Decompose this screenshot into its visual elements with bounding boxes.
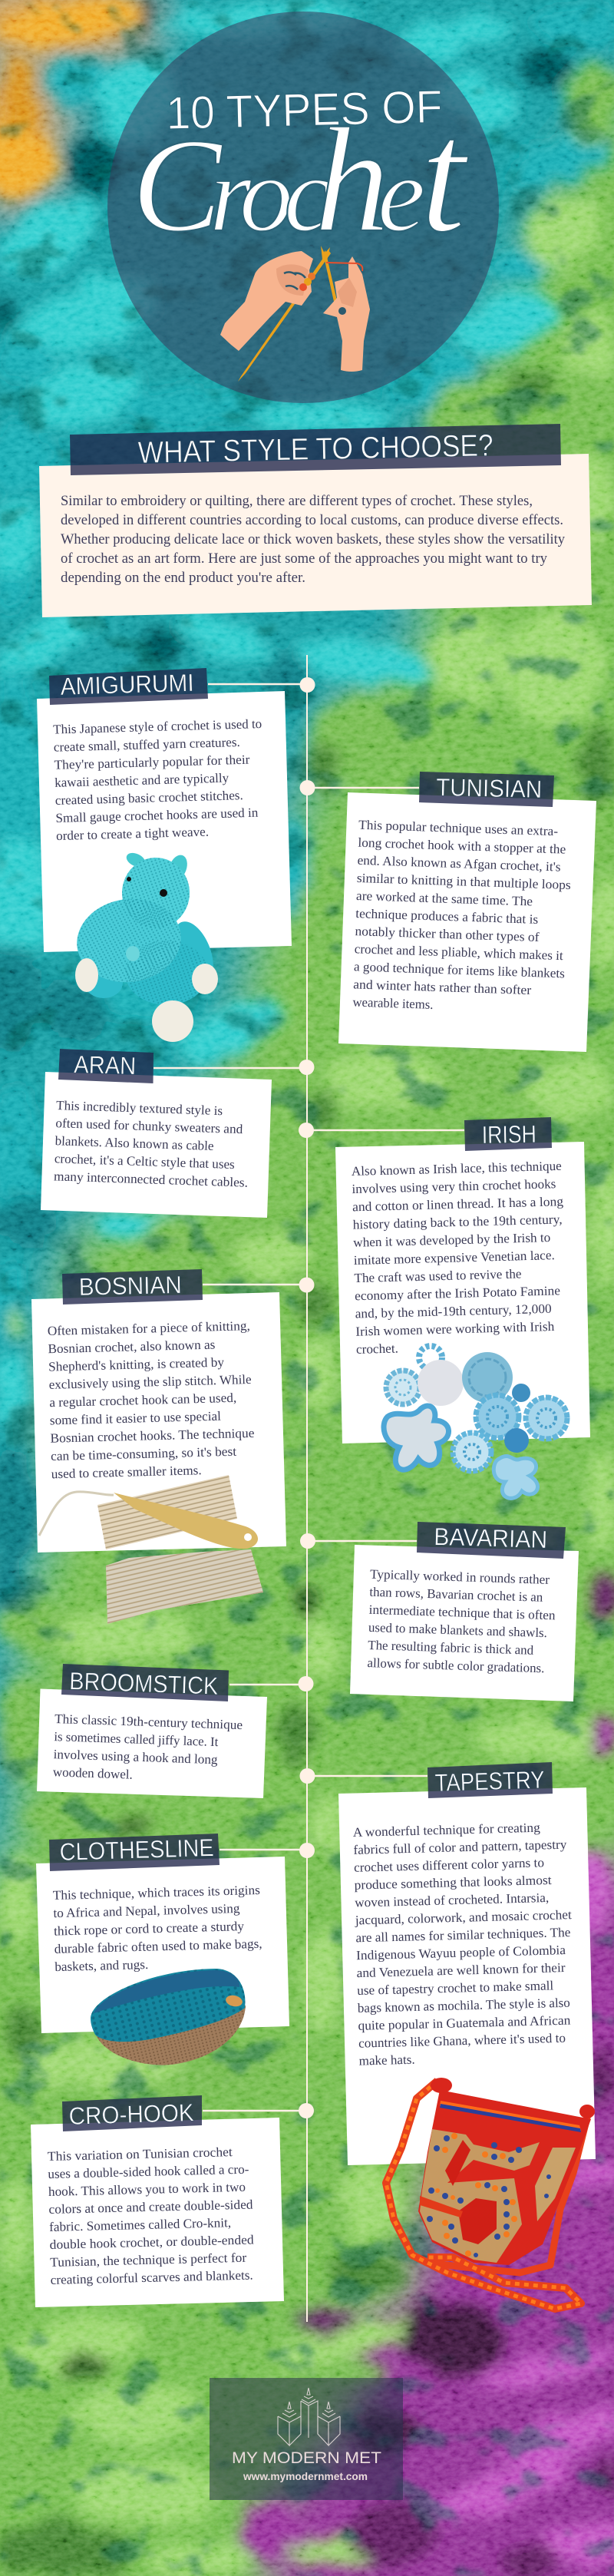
body text <box>48 1318 256 1481</box>
body text: wooden dowel. <box>53 1764 133 1782</box>
panel: cro-hook <box>31 2095 314 2307</box>
body text: involves using a hook and long <box>53 1747 218 1767</box>
footer logo: my modern met <box>210 2378 403 2500</box>
intro text: of crochet as an art form. Here are just some of the approaches you might want to try <box>61 551 548 567</box>
connector <box>299 780 419 795</box>
body text: end. Also known as Afgan crochet, it's <box>357 853 561 875</box>
label band <box>464 1117 552 1151</box>
intro card <box>39 454 592 617</box>
body text: than rows, Bavarian crochet is an <box>369 1585 543 1605</box>
body text: technique produces a fabric that is <box>355 906 539 927</box>
body text: crochet and less pliable, which makes it <box>355 941 563 963</box>
connector <box>208 677 315 693</box>
label: BAVARIAN <box>434 1523 548 1553</box>
body text: blankets. Also known as cable <box>54 1133 214 1153</box>
body text: kawaii aesthetic and are typically <box>54 771 229 790</box>
body text: Typically worked in rounds rather <box>370 1567 550 1587</box>
body text: The resulting fabric is thick and <box>368 1638 534 1658</box>
body text: a regular crochet hook can be used, <box>49 1391 236 1410</box>
label band <box>58 1049 154 1083</box>
label: ARAN <box>74 1050 137 1080</box>
body text <box>352 1820 576 2068</box>
timeline line <box>306 655 308 2322</box>
connector <box>203 1278 315 1293</box>
body text: use of tapestry crochet to make small <box>357 1978 554 1998</box>
body text: a good technique for items like blankets <box>354 959 565 980</box>
body text: crochet uses different color yarns to <box>354 1855 544 1875</box>
label: CRO-HOOK <box>68 2098 194 2130</box>
body text <box>367 1567 557 1676</box>
connector <box>300 1533 417 1549</box>
label band <box>419 772 554 807</box>
body text: This popular technique uses an extra- <box>358 818 559 838</box>
body text: A wonderful technique for creating <box>353 1820 541 1840</box>
body text: The craft was used to revive the <box>354 1266 522 1285</box>
body text: This incredibly textured style is <box>56 1098 223 1118</box>
body text: are all names for similar techniques. The <box>355 1925 571 1945</box>
label: BROOMSTICK <box>69 1667 219 1700</box>
body text: jacquard, colorwork, and mosaic crochet <box>355 1907 572 1927</box>
body text: intermediate technique that is often <box>368 1602 556 1622</box>
panel: broomstick <box>37 1664 313 1798</box>
label: CLOTHESLINE <box>59 1834 214 1866</box>
icon: building skyline <box>278 2388 340 2445</box>
body text: thick rope or cord to create a sturdy <box>54 1919 245 1939</box>
body text <box>53 1883 262 1974</box>
card <box>338 1787 596 2165</box>
body text: Also known as Irish lace, this technique <box>352 1159 562 1179</box>
body text: and winter hats rather than softer <box>353 977 532 997</box>
panel: amigurumi <box>37 668 315 1042</box>
body text: and Venezuela are well known for their <box>356 1960 566 1980</box>
title word: crochet: h <box>315 98 390 263</box>
connector <box>154 1060 315 1075</box>
body text: uses a double-sided hook called a cro- <box>48 2162 249 2181</box>
title word: crochet: e <box>378 135 425 254</box>
body text: wearable items. <box>352 994 434 1012</box>
body text: to Africa and Nepal, involves using <box>53 1901 240 1920</box>
panel: bavarian <box>300 1522 579 1701</box>
connector <box>220 1843 315 1858</box>
body text: colors at once and create double-sided <box>48 2197 253 2217</box>
body text: allows for subtle color gradations. <box>367 1655 545 1675</box>
body text: double hook crochet, or double-ended <box>49 2232 254 2252</box>
body text: similar to knitting in that multiple loops <box>357 871 571 892</box>
body text: order to create a tight weave. <box>56 825 209 843</box>
card <box>31 2118 284 2307</box>
body text: fabric. Sometimes called Cro-knit, <box>49 2215 231 2234</box>
icon: hands crocheting <box>220 246 370 382</box>
intro text: Similar to embroidery or quilting, there are different types of crochet. These styles, <box>61 494 533 509</box>
title word: crochet: o <box>239 135 293 254</box>
connector <box>299 1768 427 1784</box>
body text: woven instead of crocheted. Intarsia, <box>355 1890 549 1910</box>
logo name: MY MODERN MET <box>232 2449 381 2467</box>
body text: Shepherd's knitting, is created by <box>48 1355 225 1374</box>
logo panel <box>210 2378 403 2500</box>
logo url: www.mymodernmet.com <box>243 2470 368 2482</box>
body text: Tunisian, the technique is perfect for <box>50 2250 247 2270</box>
body text: Bosnian crochet, also known as <box>48 1338 216 1356</box>
body text: are worked at the same time. The <box>356 888 533 909</box>
intro text: depending on the end product you're after. <box>61 570 305 586</box>
panel: tunisian <box>299 772 596 1052</box>
card <box>335 1142 590 1443</box>
body text: and, by the mid-19th century, 12,000 <box>355 1301 552 1321</box>
body text: durable fabric often used to make bags, <box>54 1936 262 1956</box>
label: TAPESTRY <box>434 1766 545 1797</box>
body text: They're particularly popular for their <box>54 752 250 772</box>
body text: This Japanese style of crochet is used to <box>53 716 262 737</box>
body text: long crochet hook with a stopper at the <box>358 835 566 857</box>
body text: created using basic crochet stitches. <box>55 788 243 808</box>
panel: bosnian <box>31 1269 315 1624</box>
title word: crochet: c <box>284 135 332 254</box>
body text <box>54 1098 250 1190</box>
intro text: developed in different countries according to local customs, can produce diverse effects. <box>61 513 563 528</box>
label band <box>427 1762 553 1798</box>
body text: fabrics full of color and pattern, tapestry <box>353 1837 567 1857</box>
body text: involves using very thin crochet hooks <box>352 1176 556 1196</box>
body text: when it was developed by the Irish to <box>353 1230 550 1250</box>
card <box>37 691 292 952</box>
body text: exclusively using the slip stitch. While <box>48 1372 252 1392</box>
label band <box>49 668 208 705</box>
body text: some find it easier to use special <box>50 1409 221 1427</box>
connector <box>299 1123 464 1138</box>
body text: used to make blankets and shawls. <box>368 1620 547 1640</box>
card <box>41 1072 272 1218</box>
image: irish lace motifs <box>384 1346 567 1498</box>
body text: produce something that looks almost <box>354 1873 552 1893</box>
intro text: Whether producing delicate lace or thick woven baskets, these styles show the versatility <box>61 532 566 547</box>
body text: crochet. <box>356 1341 398 1357</box>
label band <box>62 2095 202 2131</box>
title word: crochet: C <box>132 111 223 260</box>
connector <box>229 1676 313 1691</box>
body text: This technique, which traces its origins <box>53 1883 260 1903</box>
label band <box>62 1269 203 1305</box>
body text: notably thicker than other types of <box>355 924 540 944</box>
body text: creating colorful scarves and blankets. <box>51 2268 253 2287</box>
image: crochet hippo <box>71 850 221 1042</box>
body text <box>48 2144 255 2287</box>
card <box>36 1857 289 2033</box>
panel: what style to choose <box>39 424 592 617</box>
body text: imitate more expensive Venetian lace. <box>354 1248 555 1268</box>
body text: Irish women were working with Irish <box>355 1319 555 1339</box>
body text: create small, stuffed yarn creatures. <box>54 735 240 755</box>
body text <box>53 716 265 843</box>
card <box>31 1292 286 1553</box>
body text <box>53 1711 243 1785</box>
body text: economy after the Irish Potato Famine <box>355 1283 560 1303</box>
card <box>37 1689 267 1798</box>
panel: clothesline <box>36 1834 315 2065</box>
panel: irish <box>299 1117 590 1498</box>
body text: Often mistaken for a piece of knitting, <box>48 1318 250 1338</box>
title <box>132 81 469 266</box>
title word: crochet: r <box>210 135 252 254</box>
label: IRISH <box>481 1120 536 1149</box>
body text: Bosnian crochet hooks. The technique <box>50 1426 255 1446</box>
intro text <box>61 494 566 586</box>
body text: baskets, and rugs. <box>54 1957 149 1974</box>
body text: This variation on Tunisian crochet <box>48 2144 233 2164</box>
label band <box>49 1834 220 1871</box>
image: clothesline basket <box>91 1969 246 2065</box>
body text: used to create smaller items. <box>51 1463 202 1481</box>
label: AMIGURUMI <box>60 669 194 700</box>
body text: Indigenous Wayuu people of Colombia <box>356 1943 566 1963</box>
body text <box>352 1159 568 1357</box>
card <box>350 1545 579 1701</box>
label band <box>61 1664 229 1701</box>
heading band <box>70 424 561 475</box>
panel: tapestry <box>299 1762 596 2309</box>
card <box>338 792 596 1052</box>
image: mochila bag <box>386 2078 595 2309</box>
body text: hook. This allows you to work in two <box>48 2180 246 2199</box>
body text: bags known as mochila. The style is also <box>358 1996 570 2015</box>
body text: often used for chunky sweaters and <box>55 1116 243 1136</box>
title circle <box>107 12 499 403</box>
body text: countries like Ghana, where it's used to <box>358 2031 566 2051</box>
body text: history dating back to the 19th century, <box>352 1212 563 1232</box>
body text: Small gauge crochet hooks are used in <box>55 805 259 825</box>
body text: can be time-consuming, so it's best <box>51 1444 237 1463</box>
body text: is sometimes called jiffy lace. It <box>54 1729 219 1749</box>
body text: make hats. <box>358 2052 415 2068</box>
image: bosnian swatches and hook <box>39 1475 263 1624</box>
body text <box>352 818 573 1017</box>
panel: aran <box>41 1049 315 1218</box>
body text: This classic 19th-century technique <box>54 1711 243 1732</box>
body text: and cotton or linen thread. It has a long <box>352 1194 564 1214</box>
label: BOSNIAN <box>78 1271 182 1301</box>
body text: quite popular in Guatemala and African <box>358 2013 571 2033</box>
label: TUNISIAN <box>436 773 543 803</box>
body text: crochet, it's a Celtic style that uses <box>54 1151 235 1172</box>
connector <box>203 2103 314 2118</box>
title line: 10 types of: 10 TYPES OF <box>166 81 443 139</box>
label band <box>417 1522 566 1559</box>
heading: WHAT STYLE TO CHOOSE? <box>137 428 494 470</box>
body text: many interconnected crochet cables. <box>54 1169 248 1190</box>
title word: crochet: t <box>421 88 469 266</box>
